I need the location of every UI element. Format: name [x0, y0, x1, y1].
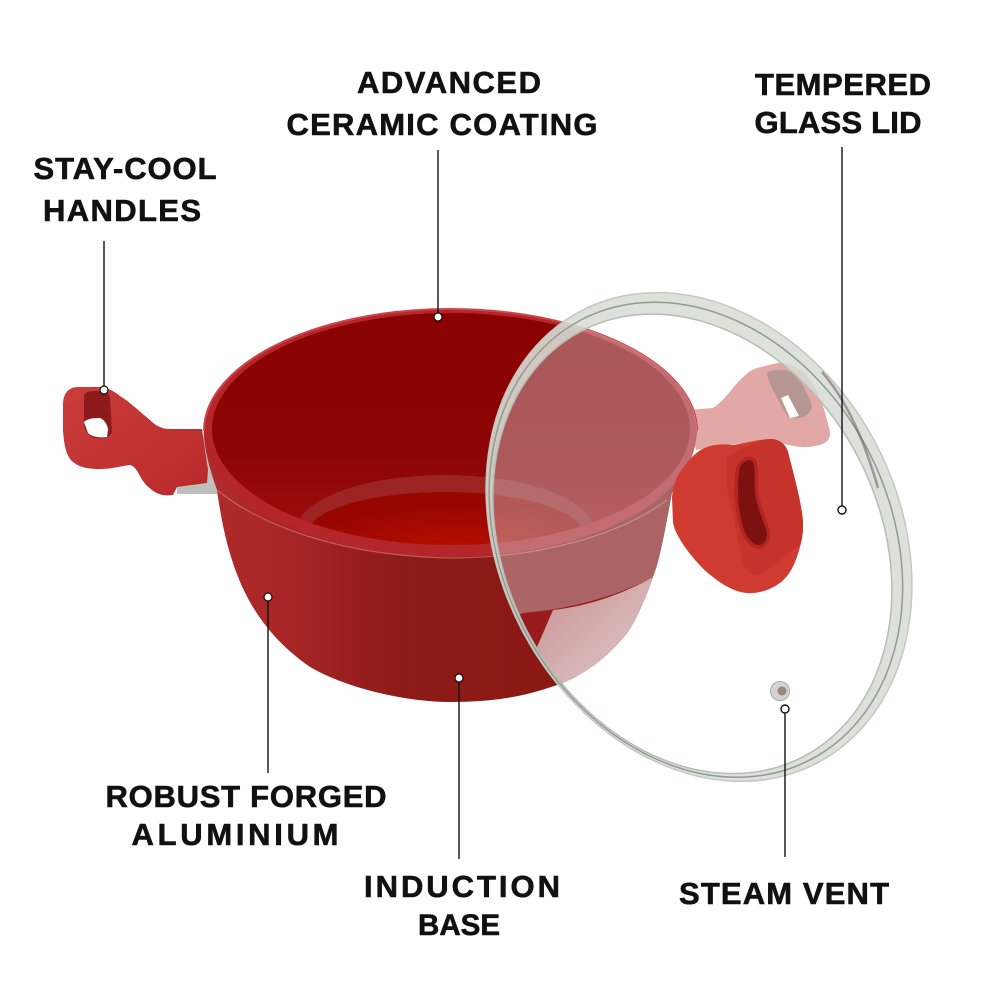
callout: handles leader line	[100, 241, 108, 394]
pot outer body	[204, 309, 697, 702]
heading: robust forged aluminium: ROBUST FORGED	[106, 779, 386, 814]
lid middle rim line	[409, 230, 983, 849]
glass reflection on pot body	[516, 577, 653, 684]
icon: near handle hole	[84, 418, 108, 437]
heading: advanced ceramic coating: ADVANCED	[357, 65, 541, 100]
icon: near pot handle	[63, 387, 208, 495]
callout: induction base leader line	[455, 674, 463, 859]
icon: lid knob grip hole	[738, 460, 767, 545]
lid dark reflection	[822, 372, 878, 488]
pot rim lower highlight	[217, 490, 667, 558]
lid rim rings	[404, 218, 994, 856]
lid outer rim line	[404, 218, 994, 856]
pot rim top highlight	[204, 309, 697, 431]
heading: robust forged aluminium	[106, 779, 386, 852]
callout: aluminium leader line	[264, 593, 272, 773]
heading: advanced ceramic coating: CERAMIC COATING	[286, 107, 598, 142]
heading: stay-cool handles: HANDLES	[43, 193, 201, 228]
icon: far pot handle	[688, 363, 830, 450]
heading: induction base	[364, 869, 560, 942]
heading: tempered glass lid	[754, 67, 931, 140]
callout: lid leader line	[838, 147, 846, 514]
icon: near handle recess	[84, 391, 112, 438]
heading: steam vent: STEAM VENT	[679, 876, 889, 911]
pot rim	[204, 309, 696, 557]
lid glass band	[404, 218, 994, 856]
heading: stay-cool handles	[34, 151, 216, 228]
heading: advanced ceramic coating	[286, 65, 598, 142]
pot and lid illustration	[63, 292, 913, 782]
pot interior	[212, 313, 690, 545]
icon: steam vent	[770, 682, 790, 700]
lid inner rim line	[416, 245, 969, 843]
icon: lid knob	[672, 439, 803, 593]
heading: robust forged aluminium: ALUMINIUM	[132, 817, 338, 852]
heading: induction base: INDUCTION	[364, 869, 560, 904]
pot interior floor	[300, 475, 592, 545]
glass tint over pot	[487, 323, 697, 616]
icon: far handle hole	[781, 395, 799, 418]
heading: tempered glass lid: GLASS LID	[754, 105, 922, 140]
heading: induction base: BASE	[418, 909, 500, 942]
icon: lid knob raised grip	[727, 439, 803, 575]
icon: steel handle bracket	[177, 430, 219, 494]
callout: steam vent leader line	[781, 705, 789, 857]
callout: coating leader line	[434, 150, 442, 321]
heading: stay-cool handles: STAY-COOL	[34, 151, 216, 186]
heading: tempered glass lid: TEMPERED	[755, 67, 931, 102]
icon: far handle recess	[767, 370, 812, 418]
